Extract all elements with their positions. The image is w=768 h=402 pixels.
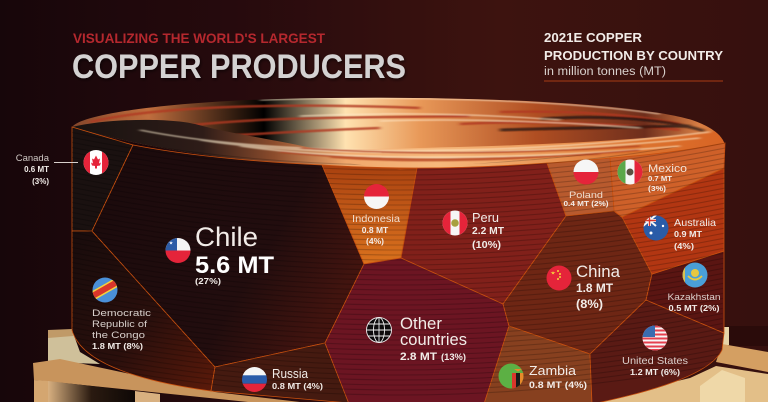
cell: Peru xyxy=(401,163,566,304)
label: Indonesia: 0.8 MT xyxy=(362,225,389,235)
label: Peru: Peru xyxy=(472,210,499,225)
label: Indonesia: Indonesia xyxy=(352,214,400,225)
chart heading: PRODUCTION BY COUNTRY xyxy=(544,48,723,63)
label: Democratic Republic of the Congo: 1.8 MT (8%) xyxy=(92,341,143,351)
label: United States: 1.2 MT (6%) xyxy=(630,367,680,377)
cell: United States xyxy=(590,300,724,402)
label: Chile: (27%) xyxy=(195,277,221,286)
label: Russia: Russia xyxy=(272,366,309,381)
label: Canada: (3%) xyxy=(32,177,49,186)
title: COPPER PRODUCERS xyxy=(72,48,406,86)
chart heading: in million tonnes (MT) xyxy=(544,66,666,78)
label: Peru xyxy=(472,210,504,251)
label: Chile xyxy=(195,222,274,286)
label: Kazakhstan xyxy=(668,292,720,313)
icon: flag of Chile xyxy=(165,238,191,264)
cell: Indonesia xyxy=(322,165,417,264)
label: Indonesia: (4%) xyxy=(366,236,384,246)
label: Democratic Republic of the Congo: Republic of xyxy=(92,319,147,330)
icon: flag of Zambia xyxy=(498,363,524,389)
coil rim band xyxy=(72,120,725,170)
label: Canada: Canada xyxy=(16,153,50,164)
cell: Democratic Republic of the Congo xyxy=(72,231,215,391)
icon: flag of Poland xyxy=(573,159,599,185)
cell: Zambia xyxy=(484,326,592,402)
label: Mexico: 0.7 MT xyxy=(648,174,672,183)
wire texture xyxy=(60,130,740,395)
icon: flag of United States xyxy=(642,325,668,351)
icon: flag of Australia xyxy=(643,215,669,241)
label: Chile: 5.6 MT xyxy=(195,252,274,279)
label: China: (8%) xyxy=(576,297,603,311)
label: Canada xyxy=(16,153,78,186)
icon: globe xyxy=(366,318,392,342)
wooden pallet: right xyxy=(590,326,768,402)
label: Poland xyxy=(564,190,609,208)
cell: Canada xyxy=(72,127,133,231)
label: Other countries: countries xyxy=(400,330,467,349)
label: Mexico: (3%) xyxy=(648,184,667,193)
icon: flag of China xyxy=(546,265,572,291)
label: Zambia xyxy=(529,363,587,391)
label: Indonesia xyxy=(352,214,400,246)
icon: flag of Indonesia xyxy=(364,184,390,210)
label: Other countries xyxy=(400,314,467,363)
icon: flag of DR Congo xyxy=(92,278,118,302)
label: Canada: 0.6 MT xyxy=(24,165,49,174)
cell: Australia xyxy=(622,168,724,274)
cell: China xyxy=(503,211,652,354)
label: Zambia: 0.8 MT (4%) xyxy=(529,380,587,391)
cell: Russia xyxy=(211,343,349,402)
label: Peru: 2.2 MT xyxy=(472,226,504,237)
label: Russia xyxy=(272,366,323,391)
label: Australia: 0.9 MT xyxy=(674,229,703,239)
label: China: China xyxy=(576,262,621,281)
label: Russia: 0.8 MT (4%) xyxy=(272,381,323,391)
cell: Other countries xyxy=(325,258,509,402)
subtitle: VISUALIZING THE WORLD'S LARGEST xyxy=(73,30,325,46)
label: Kazakhstan: Kazakhstan xyxy=(668,292,720,303)
cell: Chile xyxy=(92,145,364,367)
label: Democratic Republic of the Congo: Democratic xyxy=(92,308,151,319)
icon: flag of Peru xyxy=(442,210,468,236)
coil top surface xyxy=(72,98,724,168)
icon: flag of Canada xyxy=(83,150,109,176)
label: China xyxy=(576,262,621,311)
cell: Kazakhstan xyxy=(646,251,724,333)
label: Poland: Poland xyxy=(569,190,603,201)
label: Other countries: Other xyxy=(400,314,442,333)
label: United States: United States xyxy=(622,355,688,367)
label: Australia: Australia xyxy=(674,217,716,229)
label: Kazakhstan: 0.5 MT (2%) xyxy=(668,303,720,313)
copper coil xyxy=(60,90,740,402)
label: Democratic Republic of the Congo: the Congo xyxy=(92,330,145,341)
label: China: 1.8 MT xyxy=(576,281,614,295)
icon: flag of Russia xyxy=(242,366,268,393)
chart heading: 2021E COPPER xyxy=(544,30,643,45)
label: Australia: (4%) xyxy=(674,241,694,251)
wooden pallet: left xyxy=(33,329,300,402)
icon: flag of Kazakhstan xyxy=(682,262,708,288)
label: Australia xyxy=(674,217,716,251)
cell: Mexico xyxy=(610,143,725,217)
chart heading xyxy=(544,30,723,82)
label: Other countries: (13%) xyxy=(441,352,466,362)
label: Democratic Republic of the Congo xyxy=(92,308,151,351)
icon: flag of Mexico xyxy=(617,159,643,185)
cell: Poland xyxy=(547,158,614,216)
label: Poland: 0.4 MT (2%) xyxy=(564,199,609,208)
label: United States xyxy=(622,355,688,377)
label: Chile: Chile xyxy=(195,222,258,252)
label: Other countries: 2.8 MT xyxy=(400,351,437,363)
label: Mexico xyxy=(648,163,687,193)
label: Zambia: Zambia xyxy=(529,363,577,378)
label: Peru: (10%) xyxy=(472,240,501,251)
label: Mexico: Mexico xyxy=(648,163,687,175)
